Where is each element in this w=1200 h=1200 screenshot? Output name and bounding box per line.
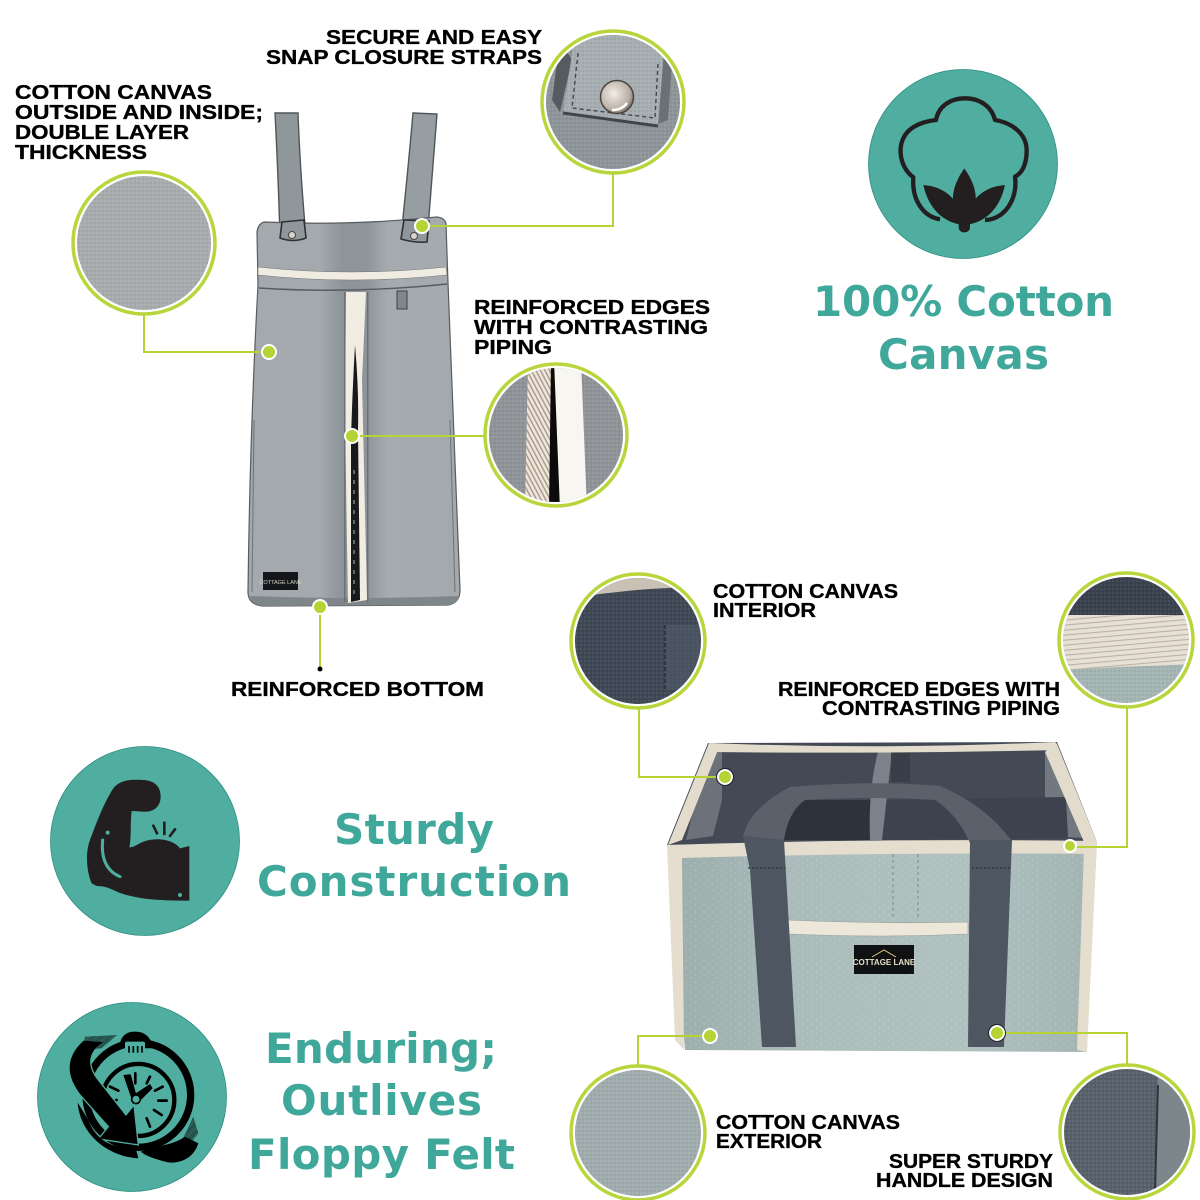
label: cotton canvas outside and inside: OUTSIDE AND INSIDE;: [15, 102, 263, 124]
right handle strap: [968, 840, 1012, 1047]
leader line: interior: [639, 708, 734, 786]
left strap: [275, 113, 306, 237]
heading: sturdy construction: Sturdy: [334, 805, 494, 854]
front piping: [667, 840, 1097, 1050]
label: caddy reinforced edges: CONTRASTING PIPING: [822, 698, 1060, 720]
brand label: [263, 572, 298, 590]
leader line: snap closure: [415, 172, 613, 233]
callout: exterior circle: [570, 1065, 705, 1200]
label: super sturdy handle: SUPER STURDY: [889, 1151, 1054, 1173]
label: caddy reinforced edges: [778, 679, 1060, 720]
label: cotton canvas outside and inside: COTTON CANVAS: [15, 82, 212, 104]
panel: hanging diaper organizer product: [248, 113, 460, 606]
label: cotton canvas outside and inside: DOUBLE LAYER: [15, 122, 190, 144]
label: snap closure straps: SECURE AND EASY: [326, 27, 543, 49]
zipper pull: [397, 291, 407, 309]
label: super sturdy handle: HANDLE DESIGN: [876, 1170, 1053, 1192]
label: cotton canvas outside and inside: [15, 82, 263, 164]
back rim: [710, 742, 1058, 753]
leader line: reinforced bottom: [313, 600, 327, 672]
heading: enduring: Outlives: [281, 1076, 482, 1125]
center opening piping: [345, 292, 367, 603]
heading: sturdy construction: Construction: [257, 857, 571, 906]
icon: stopwatch with arrow: [38, 1002, 226, 1192]
callout: snap closure circle: [540, 30, 690, 180]
label: cotton canvas outside and inside: THICKNESS: [15, 142, 147, 164]
heading: enduring: Floppy Felt: [248, 1130, 515, 1179]
callout: canvas texture circle: [70, 170, 220, 320]
leader line: handle: [988, 1024, 1127, 1065]
panel: caddy organizer product: [667, 742, 1097, 1052]
dark compartments: [784, 800, 872, 840]
panel: hanging diaper organizer product: COTTAGE LANE: [259, 580, 302, 586]
label: cotton canvas exterior: COTTON CANVAS: [716, 1112, 900, 1134]
brand label: [854, 945, 914, 974]
front face: [668, 841, 1097, 1052]
leader line: piping: [345, 429, 486, 443]
heading: enduring: [248, 1024, 515, 1179]
label: reinforced edges: PIPING: [474, 337, 552, 359]
bottom hem: [250, 596, 459, 606]
right strap: [401, 113, 437, 241]
cream band: [258, 267, 447, 280]
heading: 100% cotton canvas: 100% Cotton: [813, 277, 1114, 326]
icon: cotton boll: [868, 70, 1058, 258]
leader line: caddy piping: [1064, 708, 1127, 852]
heading: enduring: Enduring;: [265, 1024, 497, 1073]
heading: 100% cotton canvas: [813, 277, 1114, 379]
callout: handle circle: [1060, 1065, 1195, 1200]
heading: 100% cotton canvas: Canvas: [878, 330, 1049, 379]
label: reinforced edges: [474, 297, 710, 359]
left handle strap: [743, 836, 796, 1047]
label: cotton canvas exterior: EXTERIOR: [716, 1131, 823, 1153]
leader line: exterior: [638, 1029, 717, 1066]
label: reinforced edges: REINFORCED EDGES: [474, 297, 710, 319]
panel: caddy organizer product: COTTAGE LANE: [853, 958, 916, 967]
handles: [743, 783, 1011, 843]
leader line: canvas: [144, 314, 276, 359]
label: snap closure straps: SNAP CLOSURE STRAPS: [266, 47, 542, 69]
label: super sturdy handle: [876, 1151, 1054, 1192]
label: caddy reinforced edges: REINFORCED EDGES WITH: [778, 679, 1060, 701]
label: reinforced edges: WITH CONTRASTING: [474, 317, 708, 339]
label: reinforced bottom: REINFORCED BOTTOM: [231, 679, 484, 701]
callout: caddy piping circle: [1059, 573, 1195, 707]
callout: piping circle: [483, 362, 629, 508]
label: cotton canvas interior: [713, 581, 898, 622]
interior back: [667, 742, 1097, 845]
heading: sturdy construction: [257, 805, 571, 906]
callout: interior circle: [570, 574, 710, 710]
label: cotton canvas exterior: [716, 1112, 900, 1153]
body strap ends: [280, 220, 306, 240]
pocket: [788, 920, 968, 936]
icon: flexed bicep: [50, 746, 240, 936]
label: snap closure straps: [266, 27, 543, 69]
label: cotton canvas interior: COTTON CANVAS: [713, 581, 898, 603]
label: cotton canvas interior: INTERIOR: [713, 600, 817, 622]
organizer body: [248, 217, 460, 606]
